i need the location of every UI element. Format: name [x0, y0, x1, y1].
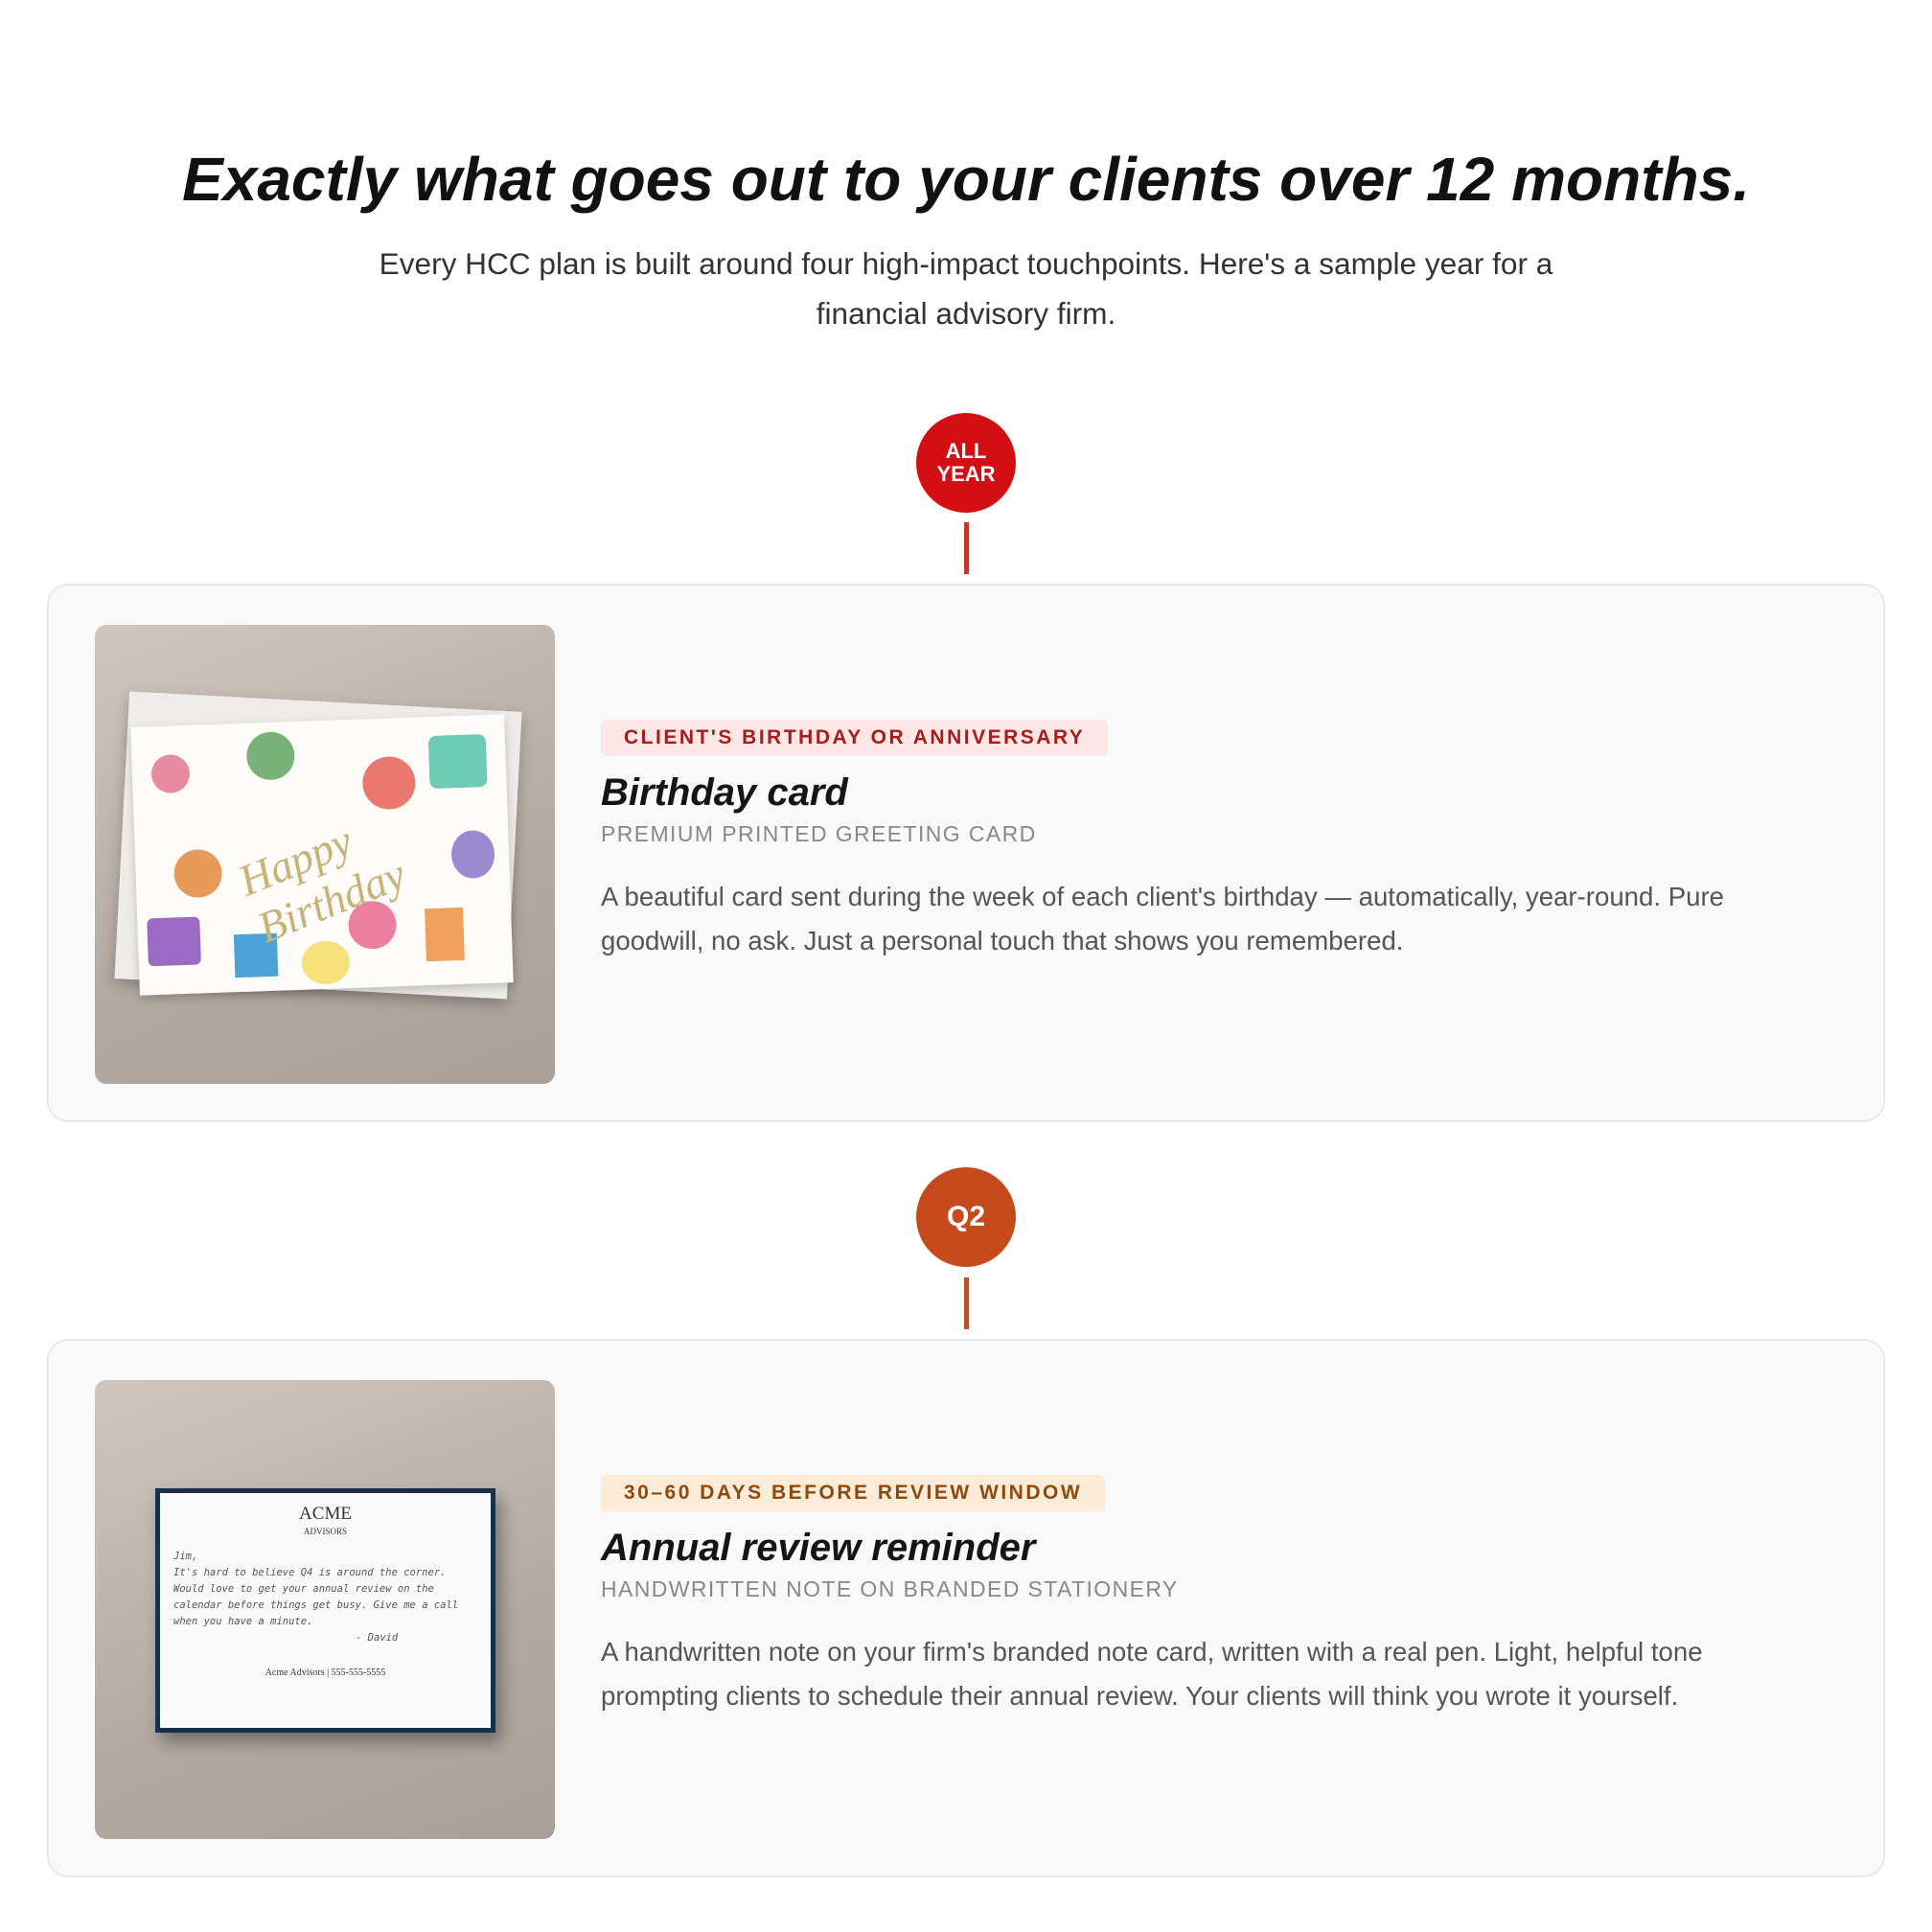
subheading: HANDWRITTEN NOTE ON BRANDED STATIONERY [601, 1576, 1179, 1601]
connector line [964, 1277, 969, 1329]
subheading: PREMIUM PRINTED GREETING CARD [601, 821, 1037, 846]
marker: all year: ALL [946, 439, 986, 463]
marker: Q2: Q2 [947, 1201, 985, 1232]
description: A handwritten note on your firm's branded note card, written with a real pen. Light, helpful tone prompting clients to schedule their annual review. Your clients will think you wrote it yourself. [601, 1637, 1703, 1711]
image: handwritten note photo: ADVISORS [304, 1527, 347, 1536]
connector line [964, 522, 969, 574]
panel: birthday card [47, 584, 1885, 1122]
tag: timing [601, 720, 1108, 756]
image: handwritten note photo: Jim, [173, 1551, 197, 1562]
marker: all year: YEAR [936, 462, 996, 486]
image: handwritten note photo: - David [356, 1632, 398, 1644]
marker: all year [916, 413, 1016, 513]
description: A beautiful card sent during the week of each client's birthday — automatically, year-round. Pure goodwill, no ask. Just a personal touch that shows you remembered. [601, 882, 1724, 955]
image: handwritten note photo: It's hard to believe Q4 is around the corner. Would love to get your annual review on the calendar before things get busy. Give me a call when you have a minute. [173, 1567, 458, 1627]
image: handwritten note photo: Acme Advisors | 555-555-5555 [265, 1668, 385, 1678]
tag: timing: CLIENT'S BIRTHDAY OR ANNIVERSARY [624, 726, 1085, 748]
image: handwritten note photo [95, 1380, 555, 1839]
title: Exactly what goes out to your clients over 12 months. [182, 145, 1750, 214]
panel: annual review reminder [47, 1339, 1885, 1877]
heading: Birthday card [601, 771, 848, 814]
subtitle: Every HCC plan is built around four high-impact touchpoints. Here's a sample year for a financial advisory firm. [380, 246, 1552, 331]
marker: Q2 [916, 1167, 1016, 1267]
image: birthday card photo [95, 625, 555, 1084]
image: handwritten note photo: ACME [299, 1504, 352, 1524]
image: birthday card photo: Happy Birthday [232, 816, 412, 953]
heading: Annual review reminder [601, 1527, 1035, 1569]
tag: timing: 30–60 DAYS BEFORE REVIEW WINDOW [624, 1482, 1082, 1504]
tag: timing [601, 1475, 1105, 1511]
